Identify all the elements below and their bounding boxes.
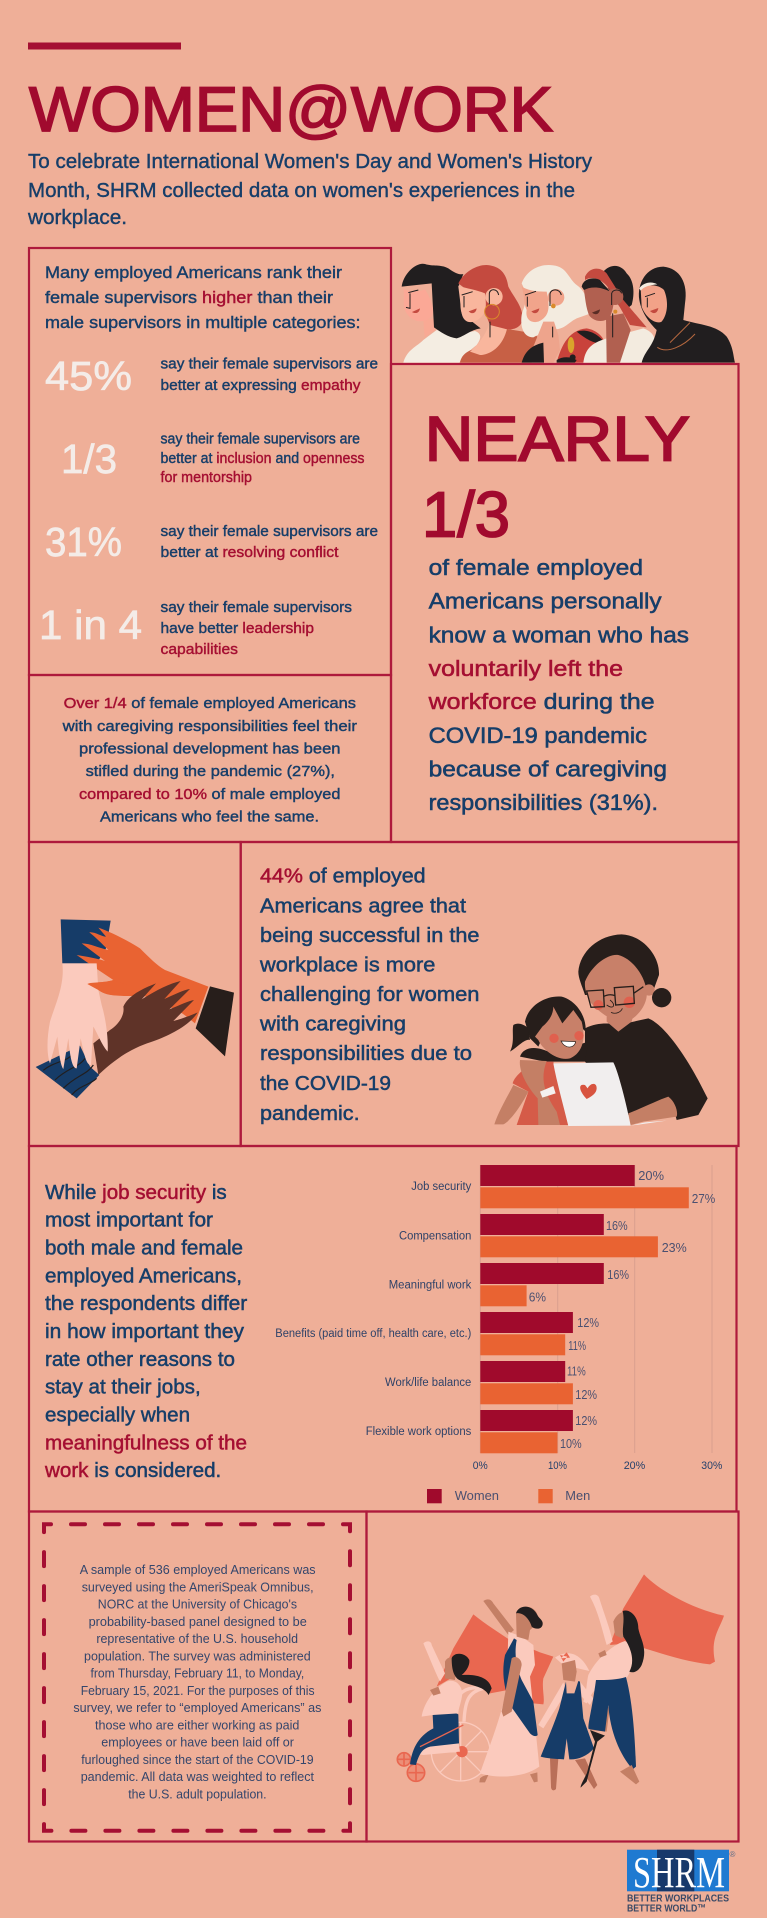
stat: 1 in 4 leadership: say their female supervisors (160, 600, 352, 616)
stat: 45% empathy (45, 353, 378, 399)
stat: 1 in 4 leadership: 1 in 4 (39, 602, 142, 648)
panel text: responsibilities (31%). (429, 790, 658, 815)
panel: nearly one third (391, 364, 738, 842)
panel text: both male and female (45, 1237, 243, 1260)
panel text: in how important they (45, 1320, 245, 1343)
bar chart: 6% (529, 1290, 546, 1305)
stat: 1 in 4 leadership (39, 600, 352, 658)
top accent bar (28, 42, 181, 50)
stat: 1/3 inclusion: for mentorship (160, 470, 252, 486)
methodology text: NORC at the University of Chicago's (98, 1597, 297, 1612)
panel text: workplace is more (259, 953, 435, 976)
panel text: the respondents differ (45, 1292, 247, 1315)
stat: 31% conflict: better at resolving conflict (160, 545, 338, 561)
panel text: Americans personally (429, 588, 662, 613)
panel: methodology (29, 1512, 366, 1842)
SHRM logo: BETTER WORKPLACES (627, 1892, 729, 1904)
panel text: challenging for women (260, 983, 480, 1006)
panel text: most important for (45, 1209, 213, 1232)
panel text: with caregiving (259, 1013, 406, 1036)
panel: professional development: compared to 10% of male employed (79, 787, 340, 803)
bar chart: Flexible work options (366, 1426, 472, 1438)
bar chart: 11% (567, 1364, 586, 1379)
headline: 1/3: 1/3 (422, 479, 510, 551)
bar chart: Work/life balance (385, 1377, 471, 1389)
panel: professional development: stifled during the pandemic (27%), (86, 764, 335, 780)
intro text: To celebrate International Women's Day and Women's History (28, 151, 592, 173)
SHRM logo: BETTER WORLD™ (627, 1902, 706, 1914)
methodology text: employees or have been laid off or (101, 1735, 295, 1750)
panel text (427, 555, 689, 815)
methodology text: February 15, 2021. For the purposes of this (81, 1683, 315, 1698)
panel text (44, 1181, 247, 1482)
stat: 1 in 4 leadership: capabilities (160, 642, 238, 658)
panel: professional development: Americans who feel the same. (100, 810, 319, 826)
bar chart: 12% (575, 1387, 597, 1402)
illustration: five women (402, 264, 735, 363)
dashed frame (44, 1524, 350, 1831)
panel: professional development: Over 1/4 of female employed Americans (64, 696, 356, 712)
panel text: meaningfulness of the (45, 1431, 247, 1454)
title: WOMEN@WORK (29, 75, 553, 145)
panel intro text: Many employed Americans rank their (45, 264, 343, 282)
panel text: because of caregiving (429, 757, 667, 782)
panel text: stay at their jobs, (45, 1376, 201, 1399)
SHRM logo (627, 1848, 736, 1914)
methodology text: the U.S. adult population. (128, 1786, 267, 1802)
panel text: COVID-19 pandemic (429, 723, 647, 748)
panel: reasons to stay (29, 1146, 736, 1512)
panel text: the COVID-19 (260, 1072, 391, 1095)
panel text: of female employed (429, 555, 643, 580)
panel text: Americans agree that (260, 894, 466, 917)
stat: 1/3 inclusion: say their female supervisors are (160, 432, 360, 448)
chart legend: Men (565, 1488, 590, 1503)
bar chart: 16% (606, 1218, 628, 1233)
stat: 45% empathy: say their female supervisors are (160, 356, 378, 372)
stat: 45% empathy: better at expressing empathy (160, 378, 361, 394)
panel text: especially when (45, 1404, 190, 1427)
bar chart: Compensation (399, 1230, 471, 1242)
panel text: pandemic. (260, 1102, 360, 1125)
panel text: employed Americans, (45, 1264, 242, 1287)
panel: professional development: professional development has been (79, 742, 340, 758)
panel text: workforce during the (427, 689, 655, 714)
methodology text: those who are either working as paid (95, 1717, 299, 1732)
headline: NEARLY: NEARLY (425, 405, 690, 475)
panel text (259, 864, 480, 1125)
panel intro text (45, 264, 360, 332)
panel: caregiving challenge (241, 842, 738, 1146)
icon: three joined hands (36, 919, 234, 1098)
panel: professional development: with caregiving responsibilities feel their (61, 719, 357, 735)
stat: 45% empathy: 45% (45, 353, 132, 399)
methodology text: representative of the U.S. household (96, 1631, 298, 1646)
methodology text: survey, we refer to “employed Americans” as (73, 1700, 322, 1715)
bar chart: 16% (607, 1267, 629, 1282)
illustration: mother and child with laptop (494, 934, 708, 1126)
panel intro text: female supervisors higher than their (45, 289, 334, 307)
panel text: being successful in the (260, 924, 480, 947)
bar chart: 23% (662, 1240, 687, 1255)
illustration: women marching with flags (397, 1574, 724, 1790)
SHRM logo: SHRM (633, 1848, 725, 1897)
panel text: responsibilities due to (260, 1042, 472, 1065)
chart legend: Women (455, 1488, 499, 1503)
bar chart: 30% (701, 1460, 722, 1472)
bar chart: Meaningful work (389, 1279, 472, 1291)
panel: supervisors comparison (29, 248, 391, 675)
methodology text: probability-based panel designed to be (89, 1614, 307, 1629)
methodology text: A sample of 536 employed Americans was (80, 1562, 316, 1577)
bar chart (275, 1165, 722, 1472)
intro text (27, 151, 592, 229)
bar chart: Benefits (paid time off, health care, etc.) (275, 1328, 471, 1340)
stat: 1/3 inclusion: 1/3 (61, 436, 117, 482)
wheelchair (431, 1688, 490, 1781)
methodology text: furloughed since the start of the COVID-19 (81, 1752, 314, 1767)
stat: 1 in 4 leadership: have better leadership (160, 621, 314, 637)
bar chart: 20% (638, 1168, 664, 1183)
stat: 1/3 inclusion (61, 432, 364, 486)
bar chart: 12% (575, 1413, 597, 1428)
intro text: Month, SHRM collected data on women's experiences in the (28, 180, 575, 202)
bar chart: 12% (577, 1315, 599, 1330)
stat: 31% conflict: 31% (45, 519, 122, 565)
intro text: workplace. (27, 207, 127, 229)
bar chart: 20% (624, 1460, 646, 1472)
stat: 1/3 inclusion: better at inclusion and openness (160, 451, 364, 467)
stat: 31% conflict: say their female supervisors are (160, 524, 378, 540)
bar chart: 27% (692, 1191, 716, 1206)
bar chart: 0% (473, 1460, 488, 1472)
panel text: While job security is (45, 1181, 227, 1204)
panel text: rate other reasons to (45, 1348, 235, 1371)
panel text: voluntarily left the (429, 656, 623, 681)
methodology text: population. The survey was administered (84, 1648, 311, 1663)
panel: marching women illustration (366, 1512, 738, 1842)
stat: 31% conflict (45, 519, 378, 565)
bar chart: 10% (560, 1436, 582, 1451)
panel text: 44% of employed (260, 864, 426, 887)
bar chart: 11% (568, 1338, 586, 1353)
panel: professional development (29, 675, 391, 842)
panel text: work is considered. (44, 1459, 221, 1482)
chart legend (427, 1488, 590, 1503)
methodology text (73, 1562, 322, 1802)
methodology text: from Thursday, February 11, to Monday, (90, 1666, 304, 1681)
methodology text: pandemic. All data was weighted to reflect (81, 1769, 314, 1784)
panel intro text: male supervisors in multiple categories: (45, 314, 360, 332)
panel: hands illustration (29, 842, 241, 1146)
bar chart: Job security (411, 1181, 472, 1193)
bar chart: 10% (548, 1460, 567, 1472)
methodology text: surveyed using the AmeriSpeak Omnibus, (82, 1579, 314, 1594)
SHRM logo: ® (730, 1850, 736, 1859)
panel text: know a woman who has (429, 622, 689, 647)
